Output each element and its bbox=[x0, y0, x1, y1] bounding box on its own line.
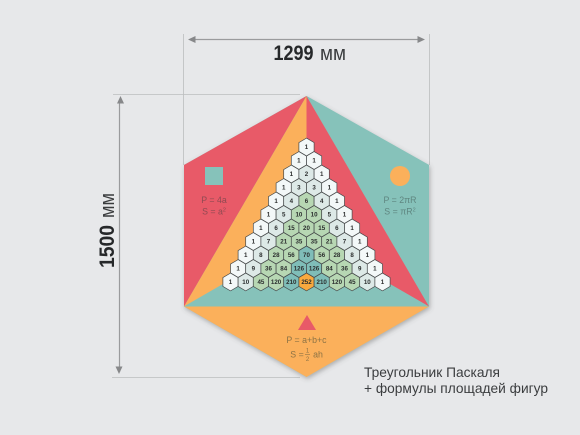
row 9 bbox=[230, 260, 382, 277]
row 6: 15 bbox=[318, 225, 326, 232]
row 10: 45 bbox=[257, 279, 265, 286]
row 1: 1 bbox=[312, 158, 316, 164]
row 1: 1 bbox=[297, 158, 301, 164]
row 10: 45 bbox=[349, 279, 356, 286]
row 5: 5 bbox=[282, 212, 286, 218]
row 7: 35 bbox=[311, 238, 318, 246]
triangle formulas: 2 bbox=[306, 357, 310, 363]
row 6: 15 bbox=[288, 225, 295, 232]
height label: 1500 bbox=[96, 225, 119, 268]
row 3: 1 bbox=[282, 184, 286, 192]
panel: inner red triangle bbox=[306, 96, 429, 306]
row 7 bbox=[246, 233, 367, 250]
row 4: 6 bbox=[305, 198, 309, 205]
row 8: 70 bbox=[303, 252, 310, 259]
row 8: 1 bbox=[244, 252, 248, 259]
circle formulas: S = πR bbox=[384, 206, 413, 216]
row 2 bbox=[284, 165, 329, 183]
row 4: 4 bbox=[290, 198, 294, 205]
row 9: 9 bbox=[358, 266, 362, 272]
row 9: 126 bbox=[309, 266, 320, 272]
row 9: 36 bbox=[341, 266, 348, 272]
row 6: 1 bbox=[350, 225, 354, 232]
row 10: 10 bbox=[364, 279, 371, 286]
hexagon board bbox=[184, 96, 429, 377]
row 8: 8 bbox=[350, 252, 354, 259]
row 10: 210 bbox=[286, 279, 297, 286]
row 7: 1 bbox=[252, 238, 256, 246]
row 7: 21 bbox=[326, 238, 333, 246]
panel: bottom orange triangle bbox=[184, 306, 429, 377]
row 8: 1 bbox=[366, 252, 370, 259]
row 7: 21 bbox=[280, 238, 288, 246]
chart: Pascal triangle bbox=[223, 138, 390, 291]
icon: red triangle bbox=[298, 315, 316, 330]
row 0 bbox=[299, 138, 314, 156]
row 5: 1 bbox=[267, 212, 271, 218]
width label: 1299 bbox=[274, 42, 314, 65]
row 8: 8 bbox=[259, 252, 263, 259]
row 10: 252 bbox=[301, 279, 312, 286]
row 3: 3 bbox=[312, 184, 316, 192]
row 6: 6 bbox=[335, 225, 339, 232]
width dimension arrow bbox=[188, 36, 425, 43]
caption bbox=[364, 364, 548, 396]
row 6: 20 bbox=[303, 225, 310, 232]
row 5: 10 bbox=[295, 212, 303, 218]
row 9: 9 bbox=[252, 266, 256, 272]
row 4: 1 bbox=[335, 198, 339, 205]
height dimension arrow bbox=[116, 96, 124, 374]
row 2: 1 bbox=[320, 171, 324, 178]
row 3: 3 bbox=[297, 184, 301, 192]
row 9: 1 bbox=[373, 266, 377, 272]
row 10: 210 bbox=[317, 279, 327, 286]
row 10: 1 bbox=[229, 279, 233, 286]
circle formulas: 2 bbox=[413, 208, 416, 214]
row 10: 10 bbox=[242, 279, 250, 286]
row 4: 1 bbox=[274, 198, 278, 205]
panel: right teal triangle bbox=[306, 96, 429, 306]
row 2: 2 bbox=[305, 171, 309, 178]
row 2: 1 bbox=[290, 171, 294, 178]
panel: inner teal triangle bbox=[184, 236, 429, 306]
row 9: 126 bbox=[294, 266, 305, 272]
row 10 bbox=[223, 273, 390, 291]
row 1 bbox=[291, 152, 322, 169]
row 4: 4 bbox=[320, 198, 324, 205]
row 8 bbox=[238, 246, 375, 264]
row 8: 28 bbox=[333, 252, 341, 259]
row 5: 5 bbox=[328, 212, 332, 218]
row 0: 1 bbox=[305, 144, 309, 151]
row 7: 35 bbox=[295, 238, 303, 246]
row 9: 84 bbox=[326, 266, 333, 272]
square formulas: 2 bbox=[223, 208, 226, 214]
caption: + формулы площадей фигур bbox=[364, 380, 548, 396]
row 5: 10 bbox=[311, 212, 318, 218]
panel: inner orange triangle bbox=[184, 96, 306, 306]
row 10: 1 bbox=[381, 279, 385, 286]
row 7: 7 bbox=[267, 238, 271, 246]
row 5: 1 bbox=[343, 212, 347, 218]
row 3 bbox=[276, 179, 337, 196]
row 10: 120 bbox=[332, 279, 343, 286]
row 7: 7 bbox=[343, 238, 347, 246]
row 8: 56 bbox=[318, 252, 326, 259]
icon: teal square bbox=[205, 167, 223, 185]
triangle formulas: S = bbox=[290, 350, 304, 360]
row 9: 36 bbox=[265, 266, 272, 272]
row 6: 6 bbox=[274, 225, 278, 232]
row 9: 1 bbox=[236, 266, 240, 272]
row 8: 28 bbox=[273, 252, 280, 259]
panel: left red triangle bbox=[184, 96, 306, 306]
triangle formulas: P = a+b+c bbox=[286, 335, 327, 345]
caption: Треугольник Паскаля bbox=[364, 364, 500, 380]
circle formulas bbox=[383, 195, 417, 216]
circle formulas: P = 2πR bbox=[383, 195, 417, 205]
row 6 bbox=[253, 219, 360, 237]
icon: orange circle bbox=[390, 166, 410, 186]
triangle formulas bbox=[286, 335, 327, 363]
row 6: 1 bbox=[259, 225, 263, 232]
triangle formulas: ah bbox=[313, 350, 323, 360]
row 3: 1 bbox=[328, 184, 332, 192]
row 5 bbox=[261, 206, 352, 223]
square formulas: S = a bbox=[202, 206, 223, 216]
row 4 bbox=[268, 192, 344, 210]
row 9: 84 bbox=[280, 266, 288, 272]
row 10: 120 bbox=[271, 279, 282, 286]
square formulas bbox=[201, 195, 227, 216]
width unit: мм bbox=[320, 43, 346, 65]
square formulas: P = 4a bbox=[201, 195, 227, 205]
triangle formulas: 1 bbox=[306, 348, 310, 354]
row 8: 56 bbox=[288, 252, 295, 259]
row 7: 1 bbox=[358, 238, 362, 246]
height unit: мм bbox=[97, 193, 119, 218]
